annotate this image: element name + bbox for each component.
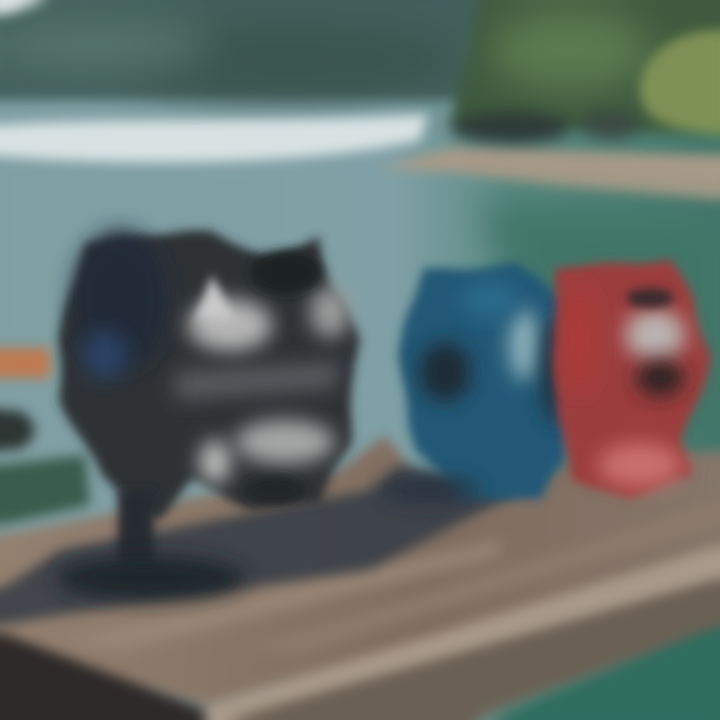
figure: blue statue [380,265,569,502]
background: white water band [0,114,428,162]
shadow: table shadow [0,465,520,625]
table: underside and lower edge [200,560,720,720]
background: far shore [380,148,720,200]
table: bottom-right water [490,625,720,720]
background: green water reflection [480,200,720,440]
background: distant hills and trees [0,0,720,144]
figure stem and base [55,490,245,600]
figure: red statue [555,258,712,498]
table: light front edge [200,545,720,720]
figure: dark statue [55,230,358,600]
table: wooden top [0,435,720,705]
table: dark left side [0,632,205,720]
table: wood streaks [60,505,720,650]
background: left shore strip and orange object [0,348,90,525]
